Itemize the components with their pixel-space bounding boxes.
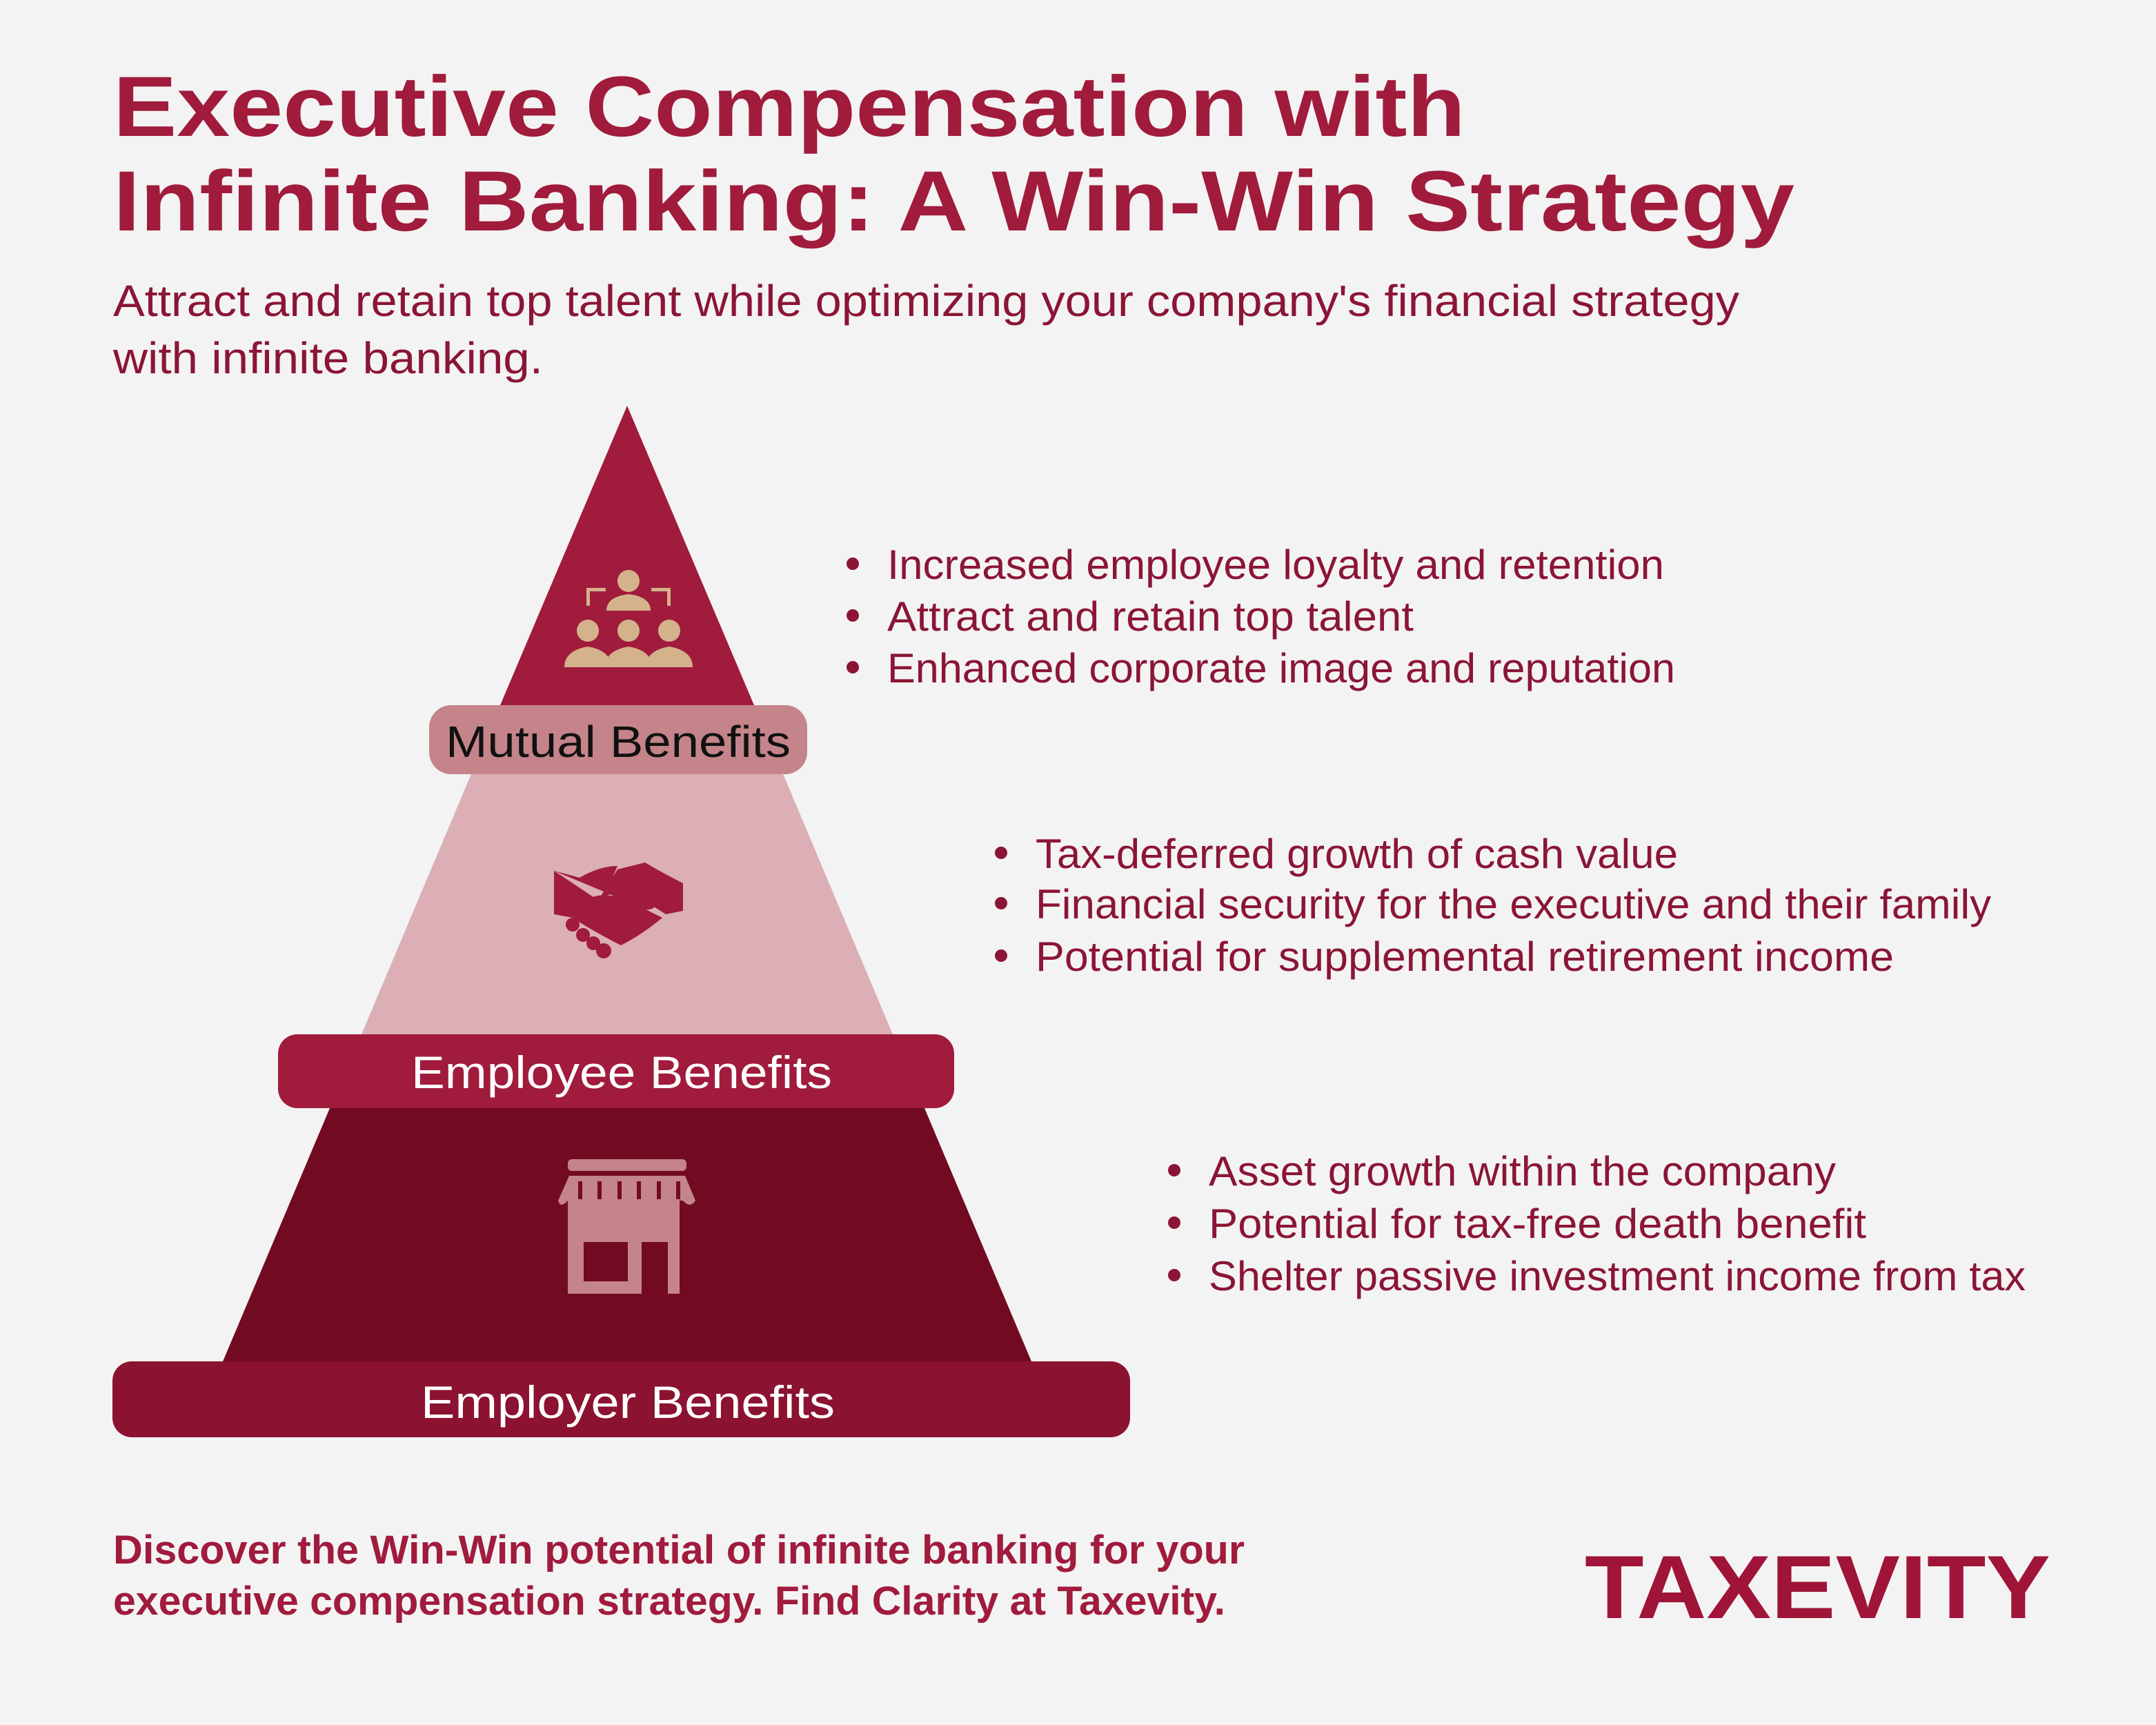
bullets: mutual	[847, 542, 1675, 691]
icon: store	[558, 1159, 695, 1294]
icon: people hierarchy	[564, 570, 693, 667]
bullets: mutual: Enhanced corporate image and reputation	[887, 645, 1675, 691]
band: employee benefits: Employee Benefits	[411, 1047, 832, 1098]
bullets: employer: Asset growth within the company	[1209, 1148, 1836, 1194]
pyramid top layer	[500, 406, 754, 705]
pyramid	[112, 406, 1130, 1437]
subtitle	[112, 276, 1739, 383]
bullets: employee: Potential for supplemental retirement income	[1036, 934, 1894, 980]
title: Executive Compensation with	[113, 59, 1465, 155]
logo: TAXEVITY	[1585, 1537, 2050, 1637]
bullets: employer: Potential for tax-free death benefit	[1209, 1201, 1866, 1247]
pyramid bottom layer	[223, 1108, 1031, 1361]
pyramid middle layer	[362, 705, 893, 1034]
bullets: employee: Financial security for the executive and their family	[1036, 881, 1991, 927]
footer call to action: executive compensation strategy. Find Clarity at Taxevity.	[113, 1579, 1225, 1624]
bullets: employer: Shelter passive investment income from tax	[1209, 1253, 2026, 1299]
title	[113, 59, 1794, 249]
bullets: employer	[1168, 1148, 2026, 1299]
subtitle: Attract and retain top talent while optimizing your company's financial strategy	[113, 276, 1739, 326]
bullets: mutual: Increased employee loyalty and retention	[887, 542, 1664, 588]
icon: handshake	[554, 862, 683, 958]
bullets: mutual: Attract and retain top talent	[887, 593, 1414, 640]
band: mutual benefits: Mutual Benefits	[446, 717, 791, 767]
footer call to action	[113, 1528, 1245, 1624]
subtitle: with infinite banking.	[112, 333, 543, 383]
band: employer benefits	[112, 1361, 1130, 1437]
title: Infinite Banking: A Win-Win Strategy	[113, 154, 1794, 249]
band: mutual benefits	[429, 705, 807, 774]
bullets: employee: Tax-deferred growth of cash value	[1036, 831, 1678, 877]
band: employer benefits: Employer Benefits	[421, 1377, 835, 1428]
band: employee benefits	[278, 1034, 954, 1108]
footer call to action: Discover the Win-Win potential of infinite banking for your	[113, 1528, 1245, 1573]
bullets: employee	[995, 831, 1991, 980]
